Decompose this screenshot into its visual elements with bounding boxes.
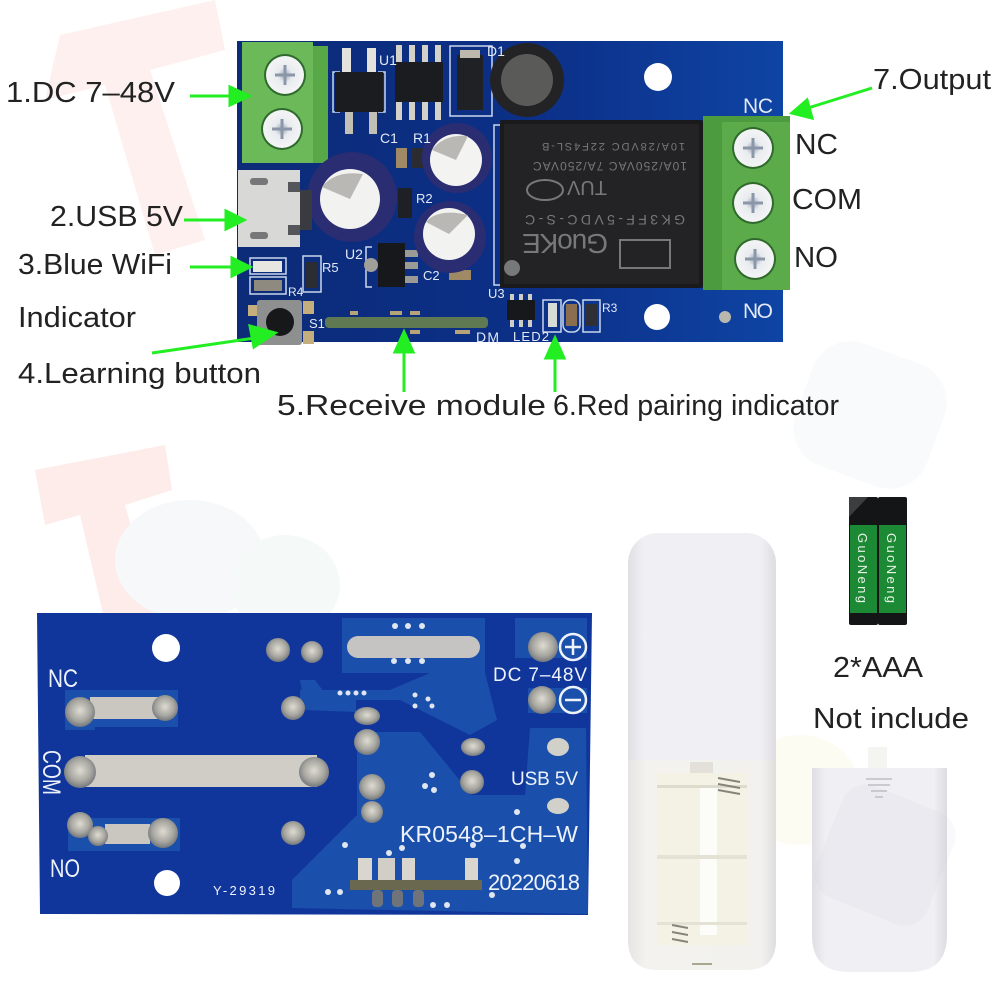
battery compartment <box>657 773 747 945</box>
board silk labels: NO <box>743 300 773 323</box>
strip top <box>347 636 480 658</box>
green arrows <box>152 87 872 392</box>
board silk labels: D1 <box>487 43 505 59</box>
text: battery note: 2*AAA <box>833 652 924 684</box>
board silk labels: R1 <box>413 130 431 146</box>
terminal: DC input <box>242 42 328 163</box>
label 4: 4.Learning button <box>18 358 261 390</box>
minus symbol <box>560 687 586 713</box>
board silk labels: R5 <box>322 260 339 275</box>
seam mark <box>692 963 712 965</box>
board silk labels <box>288 43 773 345</box>
relay: GuoKE <box>522 228 608 259</box>
chips <box>335 45 535 327</box>
small parts <box>396 148 471 280</box>
terminal: output <box>703 116 790 290</box>
mounting holes <box>152 634 180 662</box>
silk labels <box>37 665 587 898</box>
board silk labels: LED2 <box>513 329 549 344</box>
relay: 10A/250VAC 7A/250VAC <box>533 159 687 173</box>
board <box>237 41 783 342</box>
text: battery note <box>813 652 969 735</box>
strip COM <box>64 755 329 788</box>
label 3 line 2: Indicator <box>18 302 136 334</box>
silk labels: USB 5V <box>511 769 578 790</box>
module pins <box>350 858 482 907</box>
labels: top panel <box>6 64 991 422</box>
silk labels: 20220618 <box>488 870 580 895</box>
silk labels: NO <box>50 855 80 883</box>
panel: batteries: GuoNeng <box>855 533 870 603</box>
arrow 1 <box>190 87 249 105</box>
mounting hole top <box>644 63 672 91</box>
relay: GK3FF-5VDC-S-C <box>525 212 685 228</box>
text: battery note: Not include <box>813 703 969 735</box>
label 1: 1.DC 7–48V <box>6 77 176 109</box>
plus symbol <box>560 634 586 660</box>
relay <box>500 120 703 288</box>
board silk labels: R3 <box>602 301 618 315</box>
arrow 4 <box>152 326 275 353</box>
panel: receiver board back <box>37 613 592 915</box>
strip NC <box>65 695 178 727</box>
push button <box>248 300 314 345</box>
trace shading <box>65 618 588 914</box>
label 3: 3.Blue WiFi <box>18 249 172 281</box>
watermark <box>35 0 958 845</box>
solder strips <box>64 636 480 848</box>
label 2: 2.USB 5V <box>50 201 184 233</box>
mounting hole bottom <box>644 304 670 330</box>
silk labels: KR0548–1CH–W <box>400 821 578 847</box>
board silk labels: DM <box>476 329 499 345</box>
label 5: 5.Receive module <box>277 390 546 422</box>
board silk labels: NC <box>743 95 773 118</box>
receive module <box>325 313 488 332</box>
USB pads <box>547 738 569 814</box>
board silk labels: R2 <box>416 191 433 206</box>
arrow 3 <box>190 258 250 276</box>
terminal label NC: NC <box>795 129 838 161</box>
lower section <box>628 760 776 970</box>
arrow 6 <box>546 338 564 392</box>
panel: battery cover <box>807 747 963 972</box>
pcb <box>37 613 592 915</box>
solder pad <box>719 311 731 323</box>
inductor <box>490 43 564 117</box>
silk outlines <box>250 46 600 332</box>
board silk labels: C1 <box>380 130 398 146</box>
silk labels: Y-29319 <box>213 883 275 898</box>
arrow 2 <box>184 211 244 229</box>
relay: 10A/28VDC 22F4SL-B <box>542 140 685 152</box>
silk labels: NC <box>48 665 78 693</box>
USB port <box>238 170 312 247</box>
board silk labels: R4 <box>288 285 304 299</box>
board silk labels: U1 <box>379 52 397 68</box>
board silk labels: S1 <box>309 316 325 331</box>
panel: batteries: GuoNeng <box>884 533 899 603</box>
board silk labels: U2 <box>345 246 363 262</box>
label 7: 7.Output <box>873 64 991 96</box>
panel: receiver board front <box>237 41 790 345</box>
silk labels: COM <box>37 750 65 795</box>
strip NO <box>67 812 178 848</box>
label 6: 6.Red pairing indicator <box>553 390 839 422</box>
arrow 7 <box>792 88 872 118</box>
silk labels: DC 7–48V <box>493 665 587 686</box>
vias <box>325 623 526 908</box>
board silk labels: C2 <box>423 268 440 283</box>
board silk labels: U3 <box>488 286 505 301</box>
capacitors <box>307 123 492 273</box>
relay: TUV <box>566 176 607 198</box>
terminal label COM: COM <box>792 184 862 216</box>
solder joints <box>266 632 558 845</box>
arrow 5 <box>395 332 413 392</box>
panel: batteries <box>813 497 969 735</box>
LED and resistors <box>253 261 597 327</box>
terminal label NO: NO <box>794 242 838 274</box>
panel: remote control shell <box>628 533 776 970</box>
